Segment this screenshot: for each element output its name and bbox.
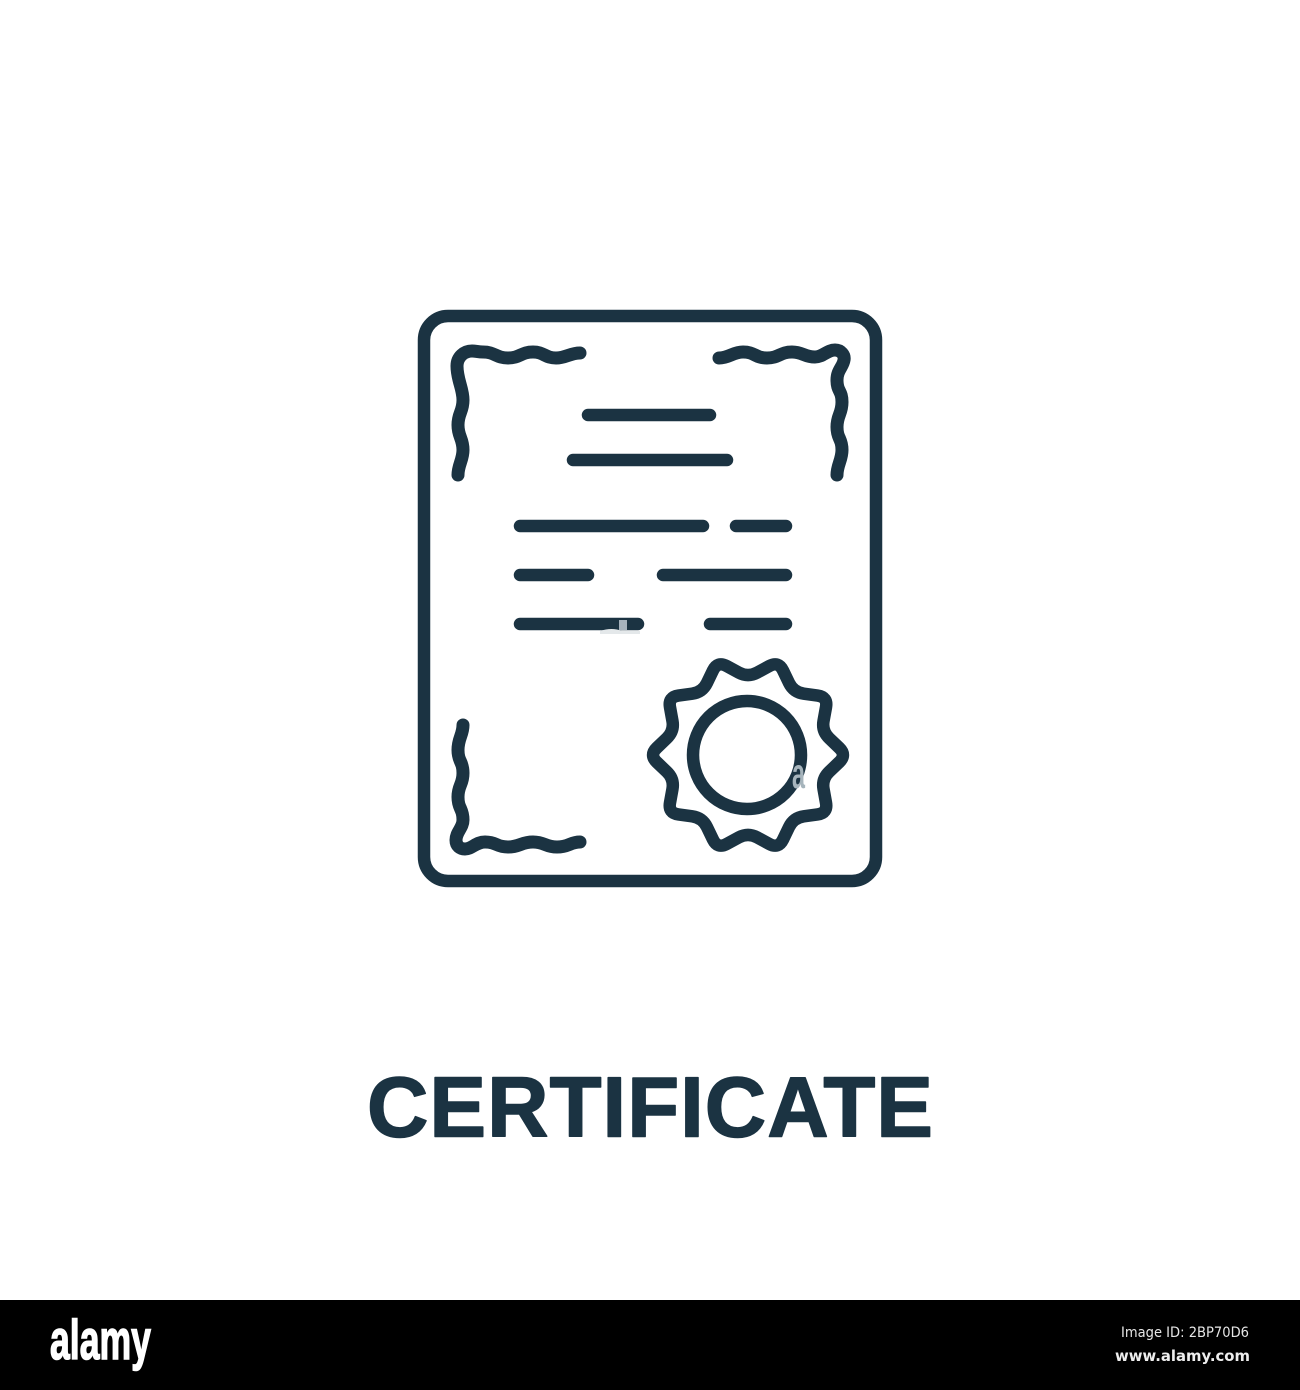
website: www.alamy.com [1115,1347,1250,1365]
watermark fragment: line [600,620,640,634]
ornament: top right corner [719,350,844,475]
seal badge [653,664,843,846]
certificate heading lines [573,415,727,460]
certificate body text lines [520,526,786,624]
ornament: bottom left corner [456,725,580,849]
ornament: top left corner [457,351,580,475]
footer bar [0,1300,1300,1390]
title: CERTIFICATE [367,1060,933,1155]
alamy logo: alamy [50,1308,151,1371]
seal inner circle [693,701,801,809]
image id: Image ID: 2BP70D6 [1121,1325,1249,1341]
document frame [424,316,876,881]
watermark fragment: letter on seal: a [792,750,806,798]
seal scalloped edge [653,664,843,846]
icon: certificate [424,316,876,881]
